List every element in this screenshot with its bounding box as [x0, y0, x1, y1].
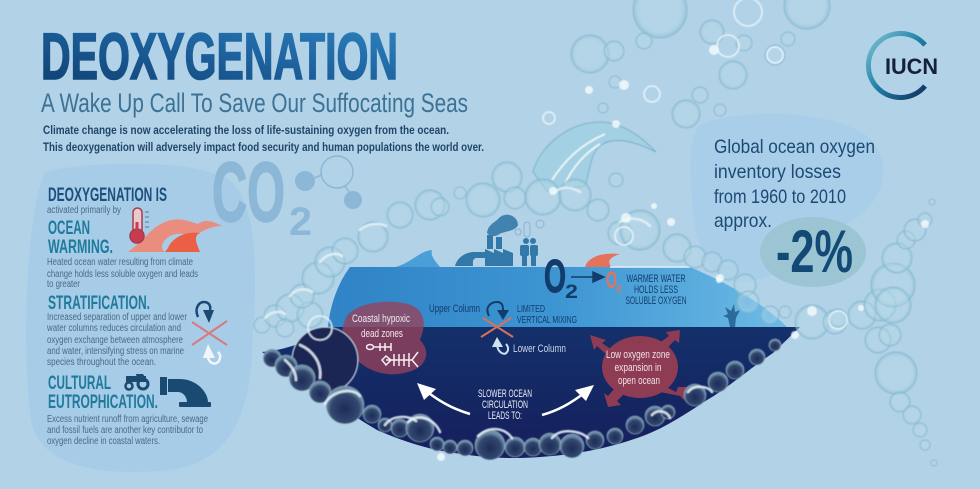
- icon: tractor: [126, 374, 148, 390]
- causes text: [46, 185, 208, 447]
- causes text: change holds less soluble oxygen and leads: [47, 269, 198, 280]
- panel: global oxygen blob: [690, 114, 883, 282]
- global oxygen text: inventory losses: [714, 161, 841, 183]
- wave on surface: [396, 250, 440, 267]
- causes text: oxygen decline in coastal waters.: [47, 436, 160, 447]
- intro text: Climate change is now accelerating the loss of life-sustaining oxygen from the ocean.: [43, 123, 449, 137]
- limited vertical mixing label: VERTICAL MIXING: [517, 315, 577, 326]
- slower circulation label: LEADS TO:: [488, 410, 522, 422]
- bubbles: fish outline lower: [263, 316, 781, 461]
- causes text: water columns reduces circulation and: [46, 323, 181, 334]
- stat: -2%: -2%: [776, 218, 853, 285]
- icon: mixing arrows and cross: [481, 302, 513, 354]
- callout: low oxygen zone expansion: expansion in: [614, 362, 662, 374]
- callout: low oxygen zone expansion: Low oxygen zone: [606, 349, 670, 361]
- slower circulation label: SLOWER OCEAN: [478, 388, 532, 400]
- icon: coral wave: [585, 254, 620, 267]
- callout: coastal hypoxic dead zones: [342, 302, 426, 374]
- warmer water note: WARMER WATER: [626, 273, 686, 285]
- warmer water note: [626, 273, 687, 307]
- callout: low oxygen zone expansion: [590, 330, 688, 407]
- O2 label: 2: [565, 282, 578, 303]
- causes text: species throughout the ocean.: [47, 357, 156, 368]
- slower circulation label: CIRCULATION: [482, 399, 528, 411]
- causes text: and water, intensifying stress on marine: [47, 346, 184, 357]
- warmer water note: HOLDS LESS: [634, 284, 678, 296]
- bubbles: fish outline upper: [254, 162, 791, 337]
- surface water: [328, 267, 787, 327]
- causes text: WARMING.: [48, 237, 113, 258]
- causes text: oxygen exchange between atmosphere: [47, 335, 183, 346]
- causes text: activated primarily by: [47, 205, 121, 216]
- causes text: OCEAN: [48, 218, 90, 239]
- causes text: DEOXYGENATION IS: [48, 185, 167, 206]
- deep water: [262, 327, 800, 458]
- limited vertical mixing label: LIMITED: [517, 304, 545, 315]
- intro text: This deoxygenation will adversely impact food security and human populations the world over.: [43, 140, 484, 154]
- icon: outflow pipe: [160, 377, 211, 407]
- global oxygen text: [714, 136, 875, 232]
- callout: coastal hypoxic dead zones: dead zones: [361, 328, 403, 340]
- global oxygen text: from 1960 to 2010: [714, 186, 846, 208]
- logo: IUCN: [868, 33, 938, 97]
- small coral O2: 2: [616, 284, 622, 295]
- global oxygen text: Global ocean oxygen: [714, 136, 875, 158]
- causes text: STRATIFICATION.: [48, 293, 150, 314]
- icon: thermometer: [130, 208, 149, 243]
- icon: coral waves: [128, 219, 222, 252]
- causes text: Increased separation of upper and lower: [47, 312, 188, 323]
- callout: coastal hypoxic dead zones: Coastal hypoxic: [352, 313, 410, 325]
- causes text: to greater: [47, 279, 81, 290]
- subtitle: A Wake Up Call To Save Our Suffocating Seas: [41, 88, 468, 118]
- seaweed: [723, 304, 740, 327]
- callout: low oxygen zone expansion: open ocean: [618, 375, 660, 387]
- icon: factory and people: [455, 215, 544, 266]
- causes text: Heated ocean water resulting from climate: [47, 257, 193, 268]
- logo: IUCN: IUCN: [885, 54, 938, 79]
- fish body: [262, 267, 800, 458]
- arrow: O2 to reduced O2: [571, 272, 604, 282]
- causes text: EUTROPHICATION.: [48, 392, 158, 413]
- wave splash: [533, 122, 656, 192]
- intro text: [43, 123, 484, 154]
- limited vertical mixing label: [517, 304, 577, 326]
- global oxygen text: approx.: [714, 210, 772, 232]
- warmer water note: SOLUBLE OXYGEN: [626, 295, 687, 307]
- O2 label: O: [544, 250, 566, 302]
- icon: fish bones: [366, 343, 418, 367]
- causes text: and fossil fuels are another key contributor to: [47, 425, 203, 436]
- icon: stratification arrows: [192, 302, 227, 364]
- CO2 watermark: CO: [212, 145, 285, 239]
- bubbles: rising top right: [543, 0, 830, 128]
- title: DEOXYGENATION: [41, 19, 398, 93]
- bubbles: tail: [791, 199, 937, 466]
- causes text: CULTURAL: [48, 373, 111, 394]
- small coral O2: O: [606, 267, 617, 294]
- causes text: Excess nutrient runoff from agriculture, sewage: [47, 414, 208, 425]
- slower circulation label: [478, 388, 532, 422]
- arrow: to coastal zones: [417, 383, 470, 414]
- panel: causes blob: [26, 164, 255, 472]
- lower column label: Lower Column: [513, 343, 566, 355]
- upper column label: Upper Column: [429, 303, 480, 315]
- arrow: to open ocean: [542, 385, 594, 415]
- CO2 watermark: 2: [289, 200, 312, 244]
